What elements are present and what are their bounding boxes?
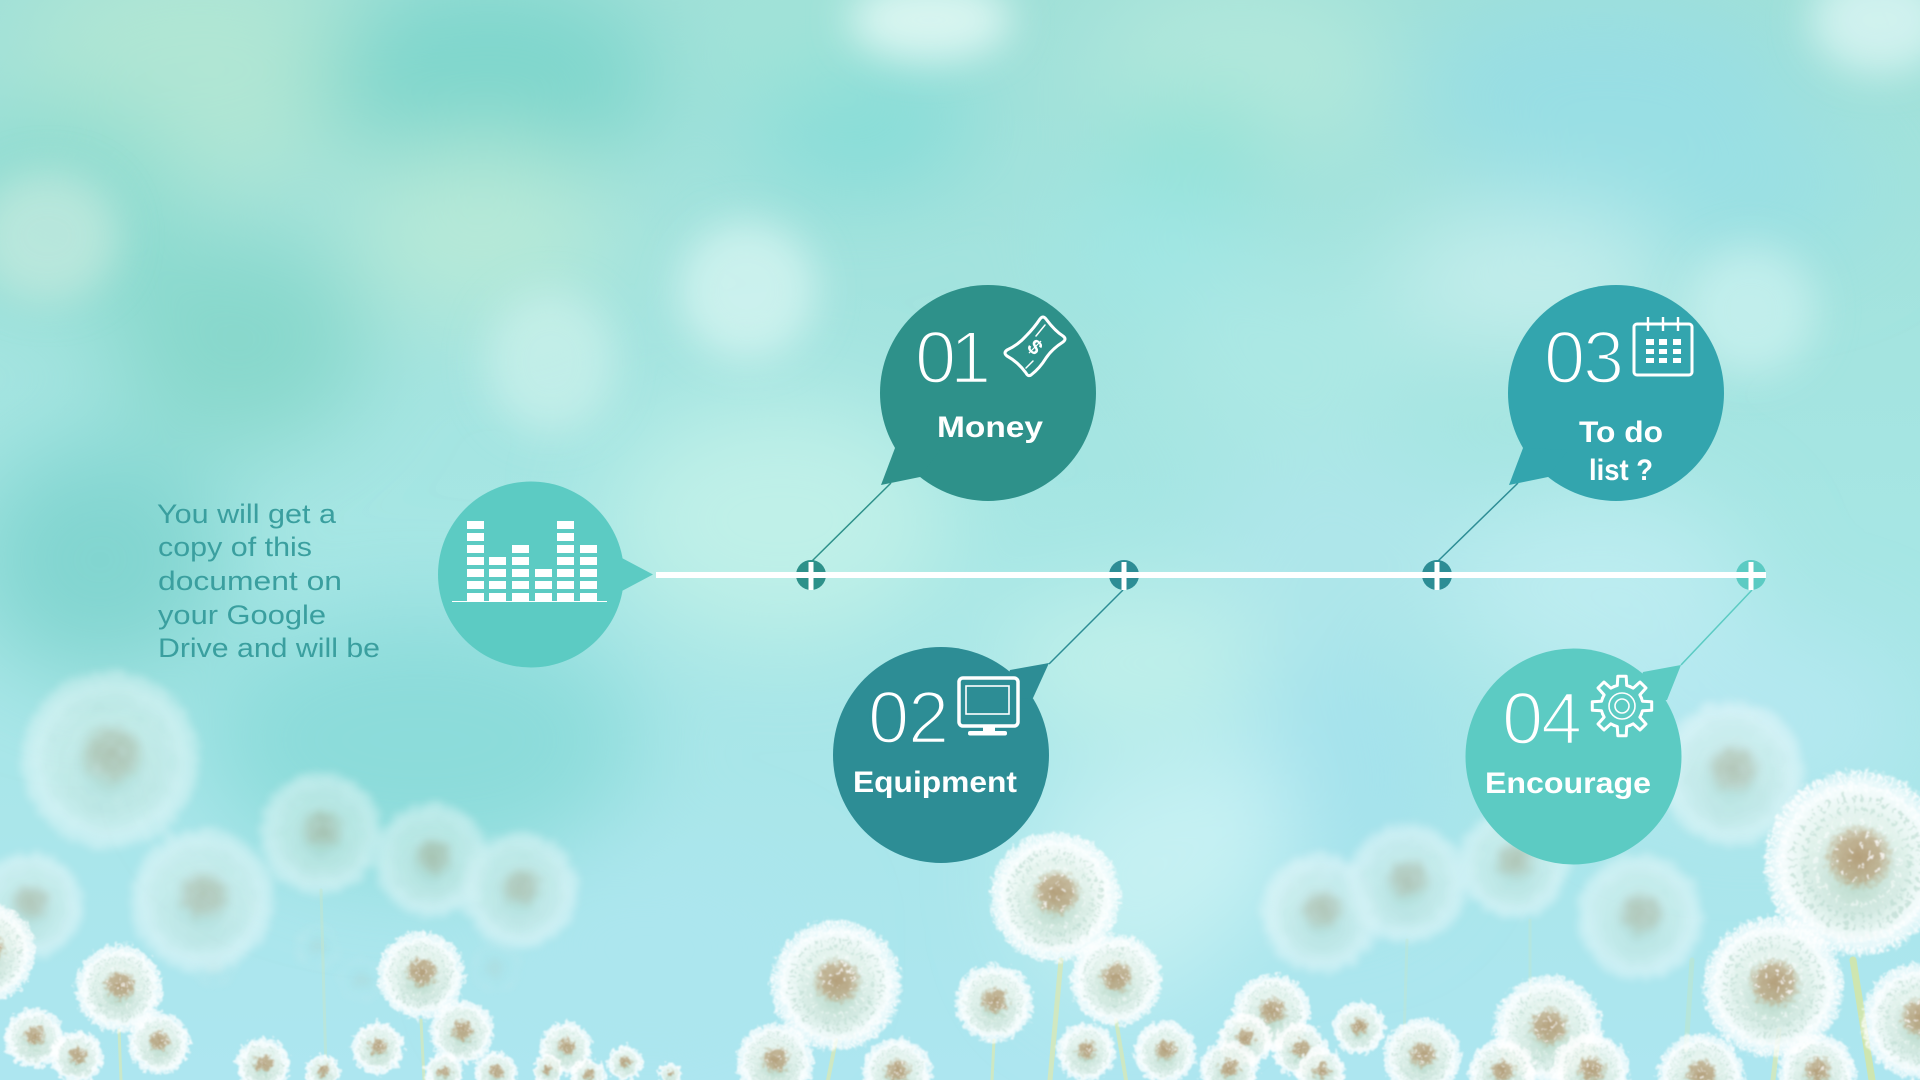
icon: monitor xyxy=(959,678,1018,736)
icon: calendar xyxy=(1634,317,1692,375)
dandelion stems xyxy=(119,890,1872,1080)
panel: 02 Equipment xyxy=(833,647,1049,863)
intro text block xyxy=(157,499,380,663)
icon: banknote: $ xyxy=(1022,335,1047,360)
intro text block: document on xyxy=(158,566,342,596)
label Equipment: Equipment xyxy=(853,766,1017,799)
label Encourage: Encourage xyxy=(1485,767,1651,800)
icon: banknote xyxy=(1005,317,1065,376)
intro text block: Drive and will be xyxy=(158,633,380,663)
label To do list xyxy=(1579,416,1663,487)
icon: gear xyxy=(1592,676,1652,736)
foreground dandelions xyxy=(0,768,1920,1080)
label To do list: To do xyxy=(1579,416,1663,449)
faded background dandelions xyxy=(0,668,1807,1000)
number 01: 01 xyxy=(915,316,991,399)
timeline node 4 xyxy=(1736,560,1766,590)
timeline node 1 xyxy=(796,560,826,590)
timeline axis xyxy=(656,572,1752,578)
intro text block: You will get a xyxy=(157,499,337,529)
number 02: 02 xyxy=(868,676,949,759)
intro text block: copy of this xyxy=(158,532,312,562)
intro text block: your Google xyxy=(158,600,326,630)
panel: 03 To do list xyxy=(1508,285,1724,501)
panel: 01 Money xyxy=(880,285,1096,501)
bokeh spots xyxy=(0,0,1920,434)
label To do list: list ? xyxy=(1589,454,1653,487)
panel: 04 Encourage xyxy=(1466,648,1682,864)
timeline node 3 xyxy=(1422,560,1452,590)
start bubble with equalizer icon xyxy=(438,482,653,668)
icon: equalizer bars xyxy=(452,521,607,602)
number 04: 04 xyxy=(1502,677,1582,760)
timeline node 2 xyxy=(1109,560,1139,590)
leader lines xyxy=(812,483,1752,665)
label Money: Money xyxy=(937,411,1043,444)
number 03: 03 xyxy=(1544,316,1624,399)
